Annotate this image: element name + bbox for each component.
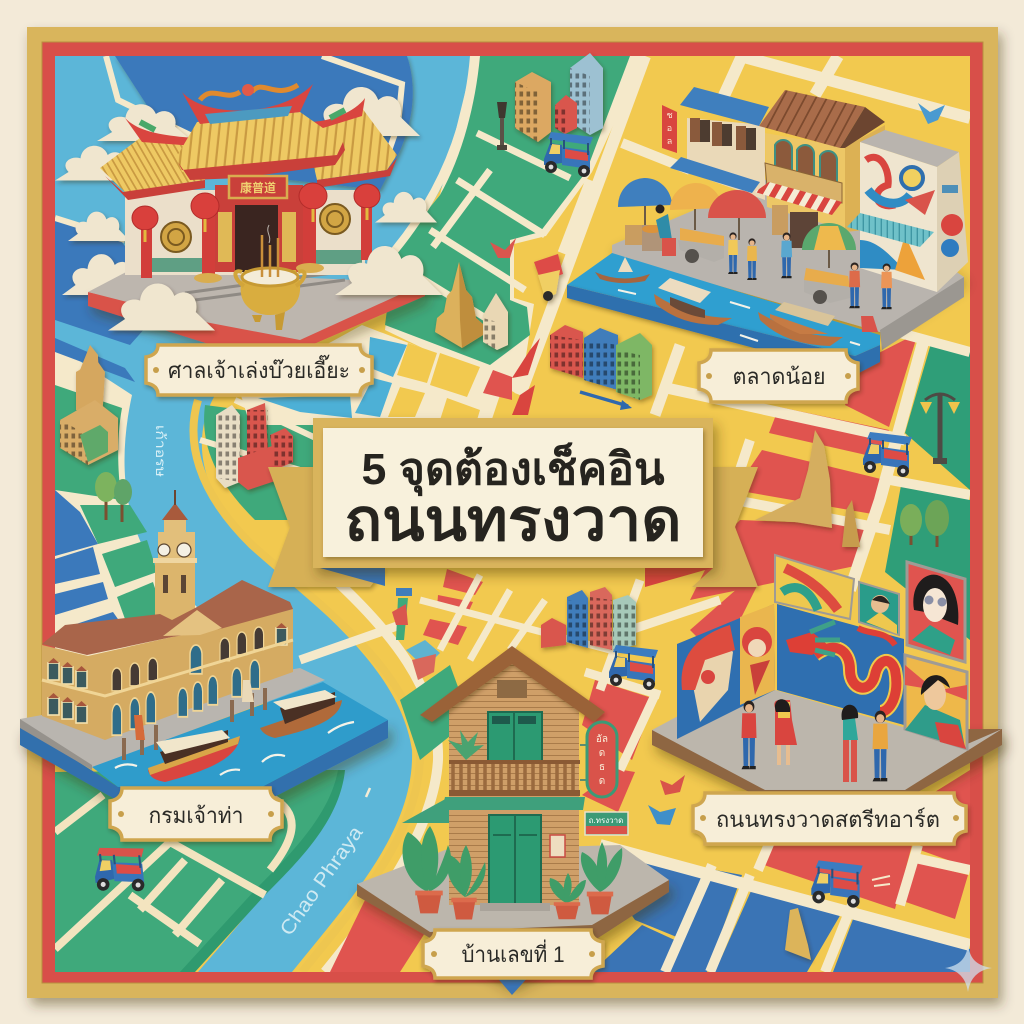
mid yellow quarter red blocks <box>423 569 655 812</box>
sunray portrait panel <box>905 655 967 749</box>
pier building arcades <box>48 623 287 735</box>
banner panel <box>323 428 703 557</box>
shrine clouds behind <box>55 87 437 295</box>
pier building roof <box>42 580 293 655</box>
left mural wall <box>677 604 775 739</box>
vertical red sign <box>662 105 677 153</box>
title text line 1: 5 จุดต้องเช็คอิน <box>362 442 664 497</box>
scene: Leng Buai Ia shrine: 康普道 <box>240 180 276 195</box>
house plinth <box>357 880 669 985</box>
icon: tuk-tuk bottom left <box>92 843 148 896</box>
green awning <box>442 797 585 810</box>
stall left with vendor <box>625 204 676 256</box>
label: House No. 1: บ้านเลขที่ 1 <box>462 939 564 967</box>
small green sign: ถ.ทรงวาด <box>589 816 623 825</box>
ribbon tails <box>268 467 758 587</box>
visitors <box>742 699 888 782</box>
icon: paper crane <box>490 238 516 258</box>
roads in blue districts <box>55 56 402 240</box>
shrine clouds in front <box>108 246 442 330</box>
notice on wall <box>550 835 565 857</box>
clock tower <box>153 490 197 620</box>
icon: tuk-tuk lower centre <box>609 645 658 690</box>
label: House No. 1 <box>423 930 603 978</box>
icon: tuk-tuk bottom right <box>811 860 890 908</box>
river name: Chao Phraya: Chao Phraya <box>276 822 368 940</box>
icon: blue bird top right <box>918 103 945 124</box>
gable vent <box>497 680 527 698</box>
boats <box>595 257 843 346</box>
ribbon fold left <box>320 568 385 586</box>
red tiny shapes <box>512 338 540 415</box>
trees, left <box>95 472 132 522</box>
top-centre buildings <box>515 53 603 142</box>
label: Harbour Department: กรมเจ้าท่า <box>148 803 244 828</box>
vertical red sign: อ <box>667 123 672 133</box>
columns <box>141 195 372 278</box>
small vendor figure and stall <box>392 588 440 680</box>
market plinth <box>612 165 964 332</box>
ridge <box>182 84 313 124</box>
icon: red bird <box>660 775 685 795</box>
house walls <box>449 655 579 905</box>
trees, right <box>900 500 949 547</box>
door panels <box>218 212 232 262</box>
central small blocks <box>240 325 512 425</box>
right red and green blocks <box>690 333 970 919</box>
pier side and deck <box>20 720 388 802</box>
shophouse row <box>550 325 652 400</box>
pier water <box>92 682 388 787</box>
ribbon fold right <box>645 568 712 587</box>
left blocks strip <box>55 352 197 656</box>
pier ripples <box>115 722 354 775</box>
label: Talat Noi <box>699 350 858 402</box>
label: Leng Buai Ia shrine: ศาลเจ้าเล่งบ๊วยเอี๊ยะ <box>168 354 350 383</box>
ridge dragons <box>200 85 298 100</box>
lanterns <box>132 183 380 230</box>
upper green district <box>385 56 645 395</box>
mural building <box>860 130 959 167</box>
bottom-left green district <box>55 770 345 972</box>
banner frame <box>313 418 713 568</box>
label: Leng Buai Ia shrine <box>146 345 372 395</box>
golden stupa and small tower <box>435 262 508 350</box>
shrine platform <box>88 283 425 350</box>
teal tip under plaque <box>495 975 530 995</box>
oval red sign: อัล <box>596 734 608 745</box>
scene: Song Wat street art <box>652 555 1002 802</box>
main roof <box>176 112 343 172</box>
icon: blue bird <box>648 805 676 825</box>
central district buildings <box>216 403 293 490</box>
vertical red sign: ล <box>667 136 672 146</box>
red portrait panel <box>907 562 965 662</box>
icon: gold paper bird <box>785 908 811 960</box>
side roofs <box>100 138 205 192</box>
paper landmark, gold <box>755 430 860 547</box>
centre dragon wall <box>777 604 904 725</box>
medallions <box>161 204 350 252</box>
pier posts <box>124 688 265 760</box>
plaque <box>229 176 287 198</box>
oval red sign: ธ <box>599 762 605 773</box>
label: Harbour Department <box>110 788 282 840</box>
small figures on pier <box>134 715 145 740</box>
balcony plant <box>448 730 484 760</box>
art plinth <box>652 729 1002 802</box>
small green sign <box>585 812 628 835</box>
umbrellas <box>618 178 856 268</box>
house roof <box>420 646 605 722</box>
upper green door <box>488 712 542 762</box>
ferry boats <box>148 690 342 782</box>
icon: sparkle <box>945 945 992 992</box>
icon: street lamp right <box>920 394 960 464</box>
upper dragon panel <box>775 555 854 619</box>
dark blue districts <box>115 56 413 190</box>
label: Song Wat Street Art: ถนนทรงวาดสตรีทอาร์ต <box>716 807 940 832</box>
shophouse two <box>765 133 845 230</box>
icon: red tuk-tuk middle <box>534 254 563 301</box>
scene: Leng Buai Ia shrine <box>55 84 442 350</box>
shophouse one <box>687 118 765 200</box>
tower buildings, left <box>60 345 118 465</box>
oval red sign: ด <box>599 776 605 787</box>
carts <box>678 228 850 304</box>
balcony <box>449 760 580 796</box>
incense burner <box>235 225 305 330</box>
bottom red blocks <box>330 900 430 972</box>
shrine walls <box>125 190 365 275</box>
small buildings, lower centre <box>541 587 636 650</box>
market people <box>728 232 892 309</box>
bottom blue blocks <box>594 864 970 972</box>
water ripples <box>618 290 860 356</box>
yellow river bank arc <box>189 398 334 623</box>
icon: tuk-tuk top centre <box>544 132 593 177</box>
canal water <box>567 253 880 356</box>
front door <box>489 815 541 905</box>
title banner <box>268 418 758 587</box>
vertical red sign: ช <box>666 110 673 120</box>
icon: street lamp top <box>497 102 507 150</box>
label: Talat Noi: ตลาดน้อย <box>732 364 826 389</box>
scene: Talat Noi market <box>567 87 968 375</box>
road arrow mark <box>580 392 628 406</box>
label: Song Wat Street Art <box>693 793 966 844</box>
road network <box>300 56 970 972</box>
scene: Harbour Department building <box>20 490 388 802</box>
potted plants <box>403 826 622 920</box>
central green circle district <box>204 405 320 520</box>
oval red sign: ด <box>599 748 605 759</box>
scene: House No. 1 <box>357 646 669 995</box>
icon: tuk-tuk right <box>863 432 912 477</box>
pier building walls <box>42 609 293 740</box>
oval red sign <box>580 722 617 797</box>
river name: Thai: เก้าอรษ <box>153 425 168 478</box>
river wave mark <box>366 788 370 797</box>
river and upper water <box>55 56 482 972</box>
teal portrait panel <box>859 582 899 635</box>
birds near street art <box>648 775 685 825</box>
title text line 2: ถนนทรงวาด <box>344 488 682 553</box>
